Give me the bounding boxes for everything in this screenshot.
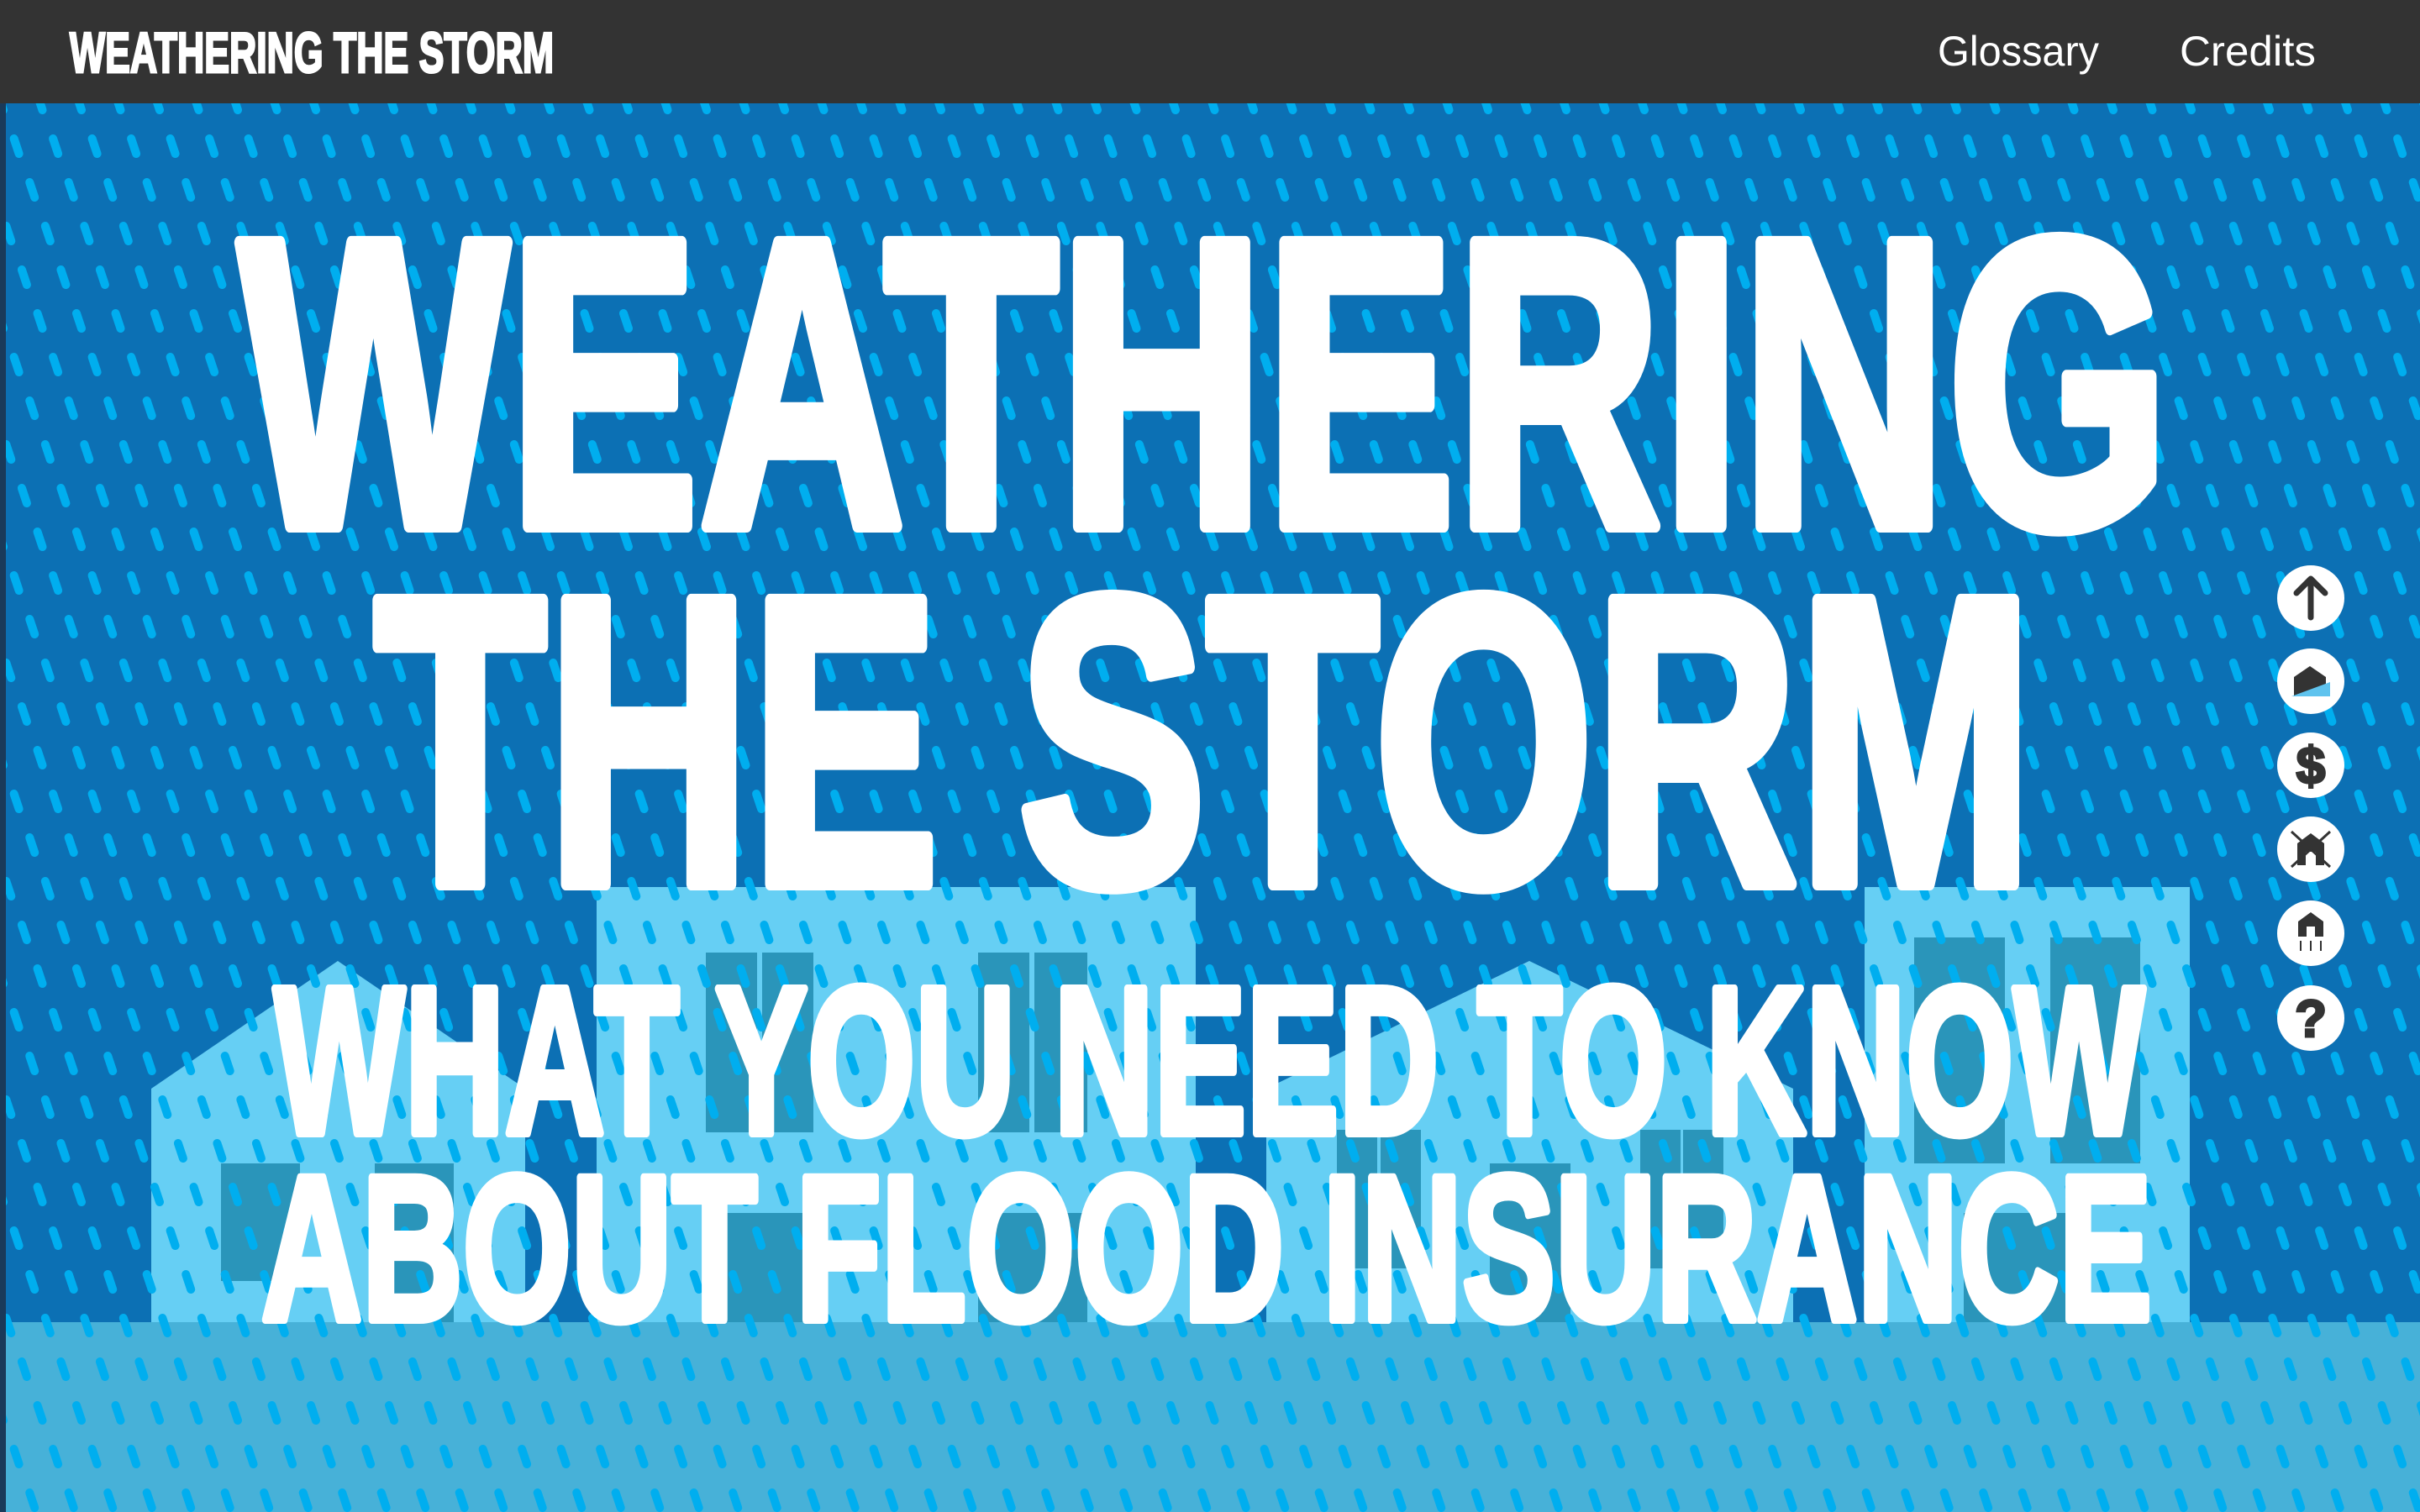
house 2 [597, 887, 1196, 1322]
icon: question [2277, 985, 2344, 1051]
nav: credits: Credits [2180, 28, 2316, 75]
house 4 [1865, 887, 2190, 1322]
side nav icons [2277, 565, 2344, 1051]
subtitle [261, 943, 2152, 1364]
house 3 [1266, 961, 1793, 1322]
logo: WEATHERING THE STORM [70, 21, 554, 85]
icon: dollar: $ [2296, 738, 2325, 795]
nav: glossary: Glossary [1938, 28, 2099, 75]
title [239, 153, 2170, 971]
icon: dollar [2277, 732, 2344, 798]
house 1 [151, 961, 525, 1322]
ground [0, 1322, 2420, 1512]
top bar [0, 0, 2420, 103]
icon: house crossed [2277, 816, 2344, 882]
icon: question: ? [2295, 990, 2327, 1048]
icon: house elevated [2277, 900, 2344, 966]
icon: house rising water [2277, 648, 2344, 714]
icon: up arrow [2277, 565, 2344, 631]
